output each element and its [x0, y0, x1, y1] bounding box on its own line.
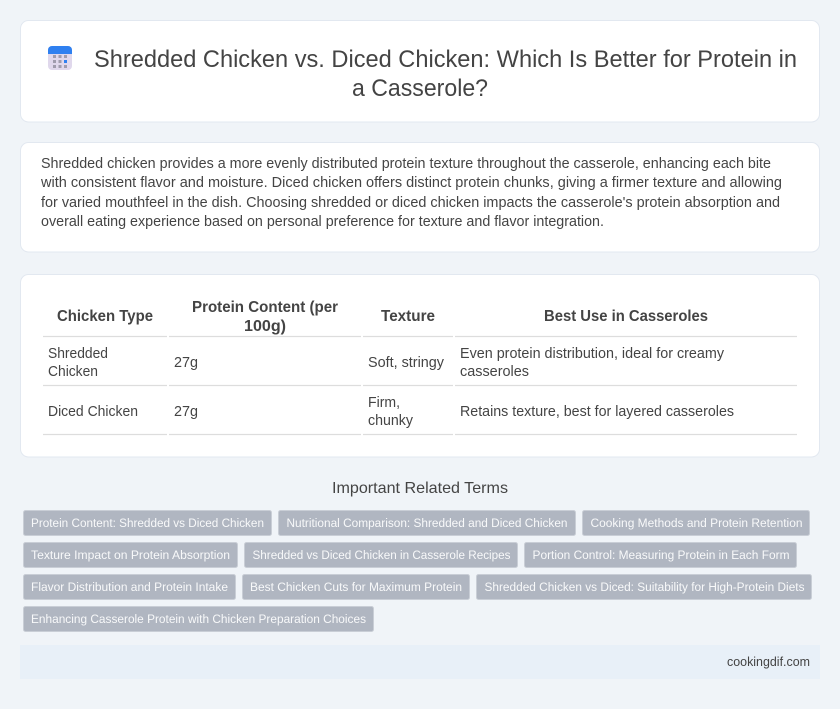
title [94, 46, 797, 102]
table row: shredded chicken [48, 346, 725, 380]
table row: diced chicken [48, 395, 734, 429]
tag [244, 542, 518, 568]
text block: introduction paragraph: overall eating experience based on personal preference for texture and flavor integration. [41, 214, 604, 230]
table row: shredded chicken: Chicken [48, 364, 98, 380]
tag: Flavor Distribution and Protein Intake [31, 580, 228, 594]
table header row: Chicken Type [57, 308, 153, 325]
tag: Enhancing Casserole Protein with Chicken Preparation Choices [31, 612, 366, 626]
tag: Shredded vs Diced Chicken in Casserole Recipes [252, 548, 510, 562]
title: a Casserole? [352, 75, 488, 102]
table header row: Best Use in Casseroles [544, 308, 708, 325]
table row: shredded chicken: casseroles [460, 364, 529, 380]
tag [524, 542, 796, 568]
tag: Cooking Methods and Protein Retention [590, 516, 803, 530]
tag [278, 510, 576, 536]
tag [24, 606, 374, 632]
tag: Best Chicken Cuts for Maximum Protein [250, 580, 462, 594]
table row: diced chicken: Retains texture, best for layered casseroles [460, 404, 734, 420]
tag: Nutritional Comparison: Shredded and Diced Chicken [286, 516, 568, 530]
panel: comparison table [20, 274, 820, 457]
panel: related term tags [24, 510, 812, 632]
tag: Shredded Chicken vs Diced: Suitability for High-Protein Diets [484, 580, 804, 594]
text block: introduction paragraph: with consistent flavor and moisture. Diced chicken offers distinct protein chunks, giving a firmer texture and allowing [40, 175, 782, 191]
table row: diced chicken: Firm, [368, 395, 400, 411]
heading: important related terms: Important Related Terms [332, 480, 508, 497]
tag: Portion Control: Measuring Protein in Each Form [532, 548, 790, 562]
tag [476, 574, 812, 600]
table row: diced chicken: chunky [368, 413, 414, 429]
tag [24, 542, 238, 568]
footer: cookingdif.com [727, 655, 810, 669]
table row: shredded chicken: Even protein distribution, ideal for creamy [460, 346, 725, 362]
table row: diced chicken: Diced Chicken [48, 404, 138, 420]
panel: header [20, 20, 820, 122]
text block: introduction paragraph [40, 156, 782, 230]
panel: introduction [20, 142, 820, 252]
tag [582, 510, 810, 536]
tag: Protein Content: Shredded vs Diced Chicken [31, 516, 264, 530]
table row: shredded chicken: Soft, stringy [368, 355, 445, 371]
text block: introduction paragraph: for varied mouthfeel in the dish. Choosing shredded or diced chicken impacts the casserole's protein absorption and [41, 195, 780, 211]
table header row: Texture [381, 308, 435, 325]
footer [20, 645, 820, 679]
table header row: Protein Content (per [192, 299, 338, 316]
tag [24, 510, 272, 536]
tag [24, 574, 236, 600]
tag [242, 574, 470, 600]
table header row [57, 299, 708, 335]
text block: introduction paragraph: Shredded chicken provides a more evenly distributed protein texture throughout the casserole, enhancing each bite [41, 156, 771, 172]
table row: shredded chicken: Shredded [48, 346, 108, 362]
title: Shredded Chicken vs. Diced Chicken: Which Is Better for Protein in [94, 46, 797, 73]
table row: shredded chicken: 27g [174, 355, 198, 371]
table row: diced chicken: 27g [174, 404, 198, 420]
icon: calendar [48, 46, 72, 70]
tag: Texture Impact on Protein Absorption [31, 548, 230, 562]
table header row: 100g) [244, 318, 286, 335]
